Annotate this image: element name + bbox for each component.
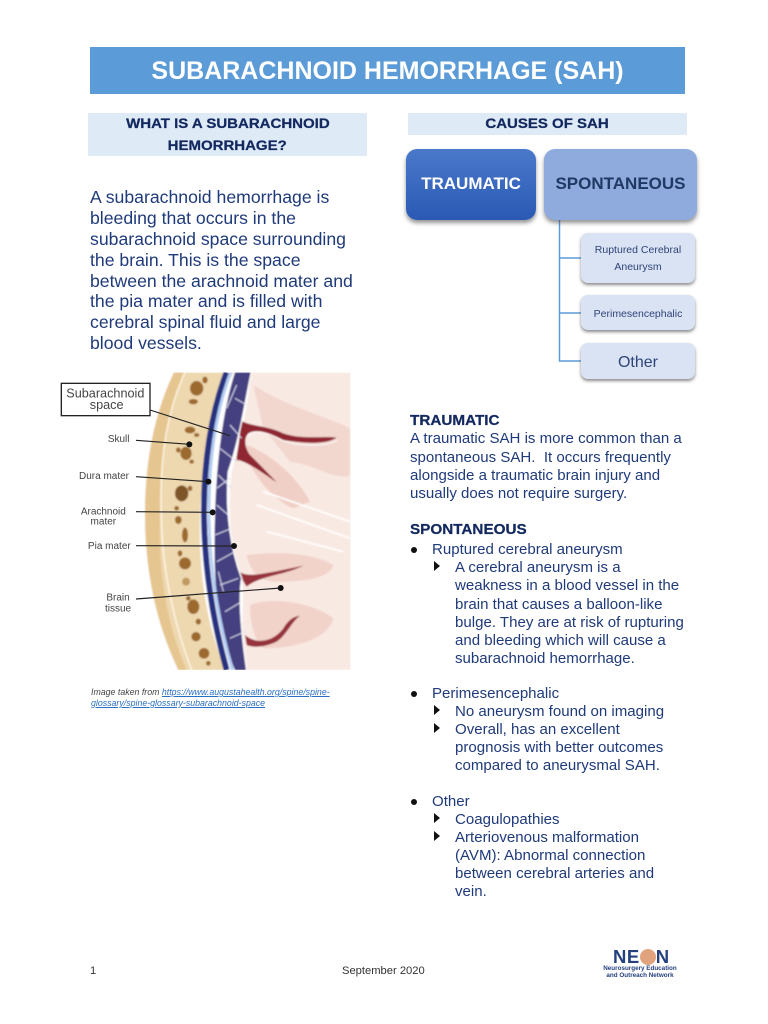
heading: causes of SAH: CAUSES OF SAH — [486, 116, 609, 131]
section: traumatic: spontaneous SAH. It occurs frequently — [410, 449, 671, 466]
section: spontaneous: brain that causes a balloon-like — [455, 596, 662, 613]
box: ruptured cerebral aneurysm: Aneurysm — [614, 261, 662, 273]
bullet: ruptured cerebral aneurysm — [411, 547, 417, 553]
box: spontaneous: SPONTANEOUS — [555, 174, 686, 193]
definition paragraph: cerebral spinal fluid and large — [90, 312, 320, 332]
bullet: other — [411, 799, 417, 805]
definition paragraph: bleeding that occurs in the — [90, 208, 296, 228]
box: traumatic — [406, 149, 536, 220]
section: spontaneous: No aneurysm found on imaging — [455, 703, 664, 720]
bullet: perimesencephalic — [411, 691, 417, 697]
heading: what is a subarachnoid hemorrhage: HEMORRHAGE? — [168, 138, 287, 152]
anatomy diagram: subarachnoid space: Brain — [106, 593, 130, 604]
image credit: glossary/spine-glossary-subarachnoid-space — [91, 698, 265, 708]
heading: what is a subarachnoid hemorrhage: WHAT IS A SUBARACHNOID — [126, 116, 329, 131]
anatomy diagram: subarachnoid space: mater — [91, 517, 117, 528]
section: traumatic: A traumatic SAH is more common than a — [410, 430, 682, 447]
definition paragraph: the brain. This is the space — [90, 250, 300, 270]
anatomy diagram: subarachnoid space: Dura mater — [79, 471, 130, 482]
section: spontaneous: prognosis with better outcomes — [455, 739, 663, 756]
footer: page number: 1 — [90, 965, 96, 977]
logo: NEON: NE N — [613, 946, 670, 967]
box: perimesencephalic — [581, 295, 695, 330]
footer: date: September 2020 — [342, 965, 425, 977]
box: other: Other — [618, 354, 658, 371]
section: spontaneous: weakness in a blood vessel in the — [455, 577, 679, 594]
section: spontaneous: Ruptured cerebral aneurysm — [432, 541, 623, 558]
section: spontaneous: Arteriovenous malformation — [455, 829, 639, 846]
section: spontaneous: compared to aneurysmal SAH. — [455, 757, 660, 774]
definition paragraph: subarachnoid space surrounding — [90, 229, 346, 249]
section: spontaneous: A cerebral aneurysm is a — [455, 559, 621, 576]
brain — [230, 372, 351, 670]
anatomy diagram: subarachnoid space: Subarachnoid — [66, 387, 144, 401]
anatomy diagram: subarachnoid space: tissue — [105, 603, 131, 614]
definition paragraph: between the arachnoid mater and — [90, 271, 353, 291]
sulci — [237, 420, 337, 482]
definition paragraph: A subarachnoid hemorrhage is — [90, 187, 329, 207]
anatomy diagram: subarachnoid space: space — [90, 398, 124, 412]
anatomy diagram: subarachnoid space: Arachnoid — [81, 507, 126, 518]
section: spontaneous: between cerebral arteries and — [455, 865, 654, 882]
logo: NEON — [603, 946, 677, 979]
section: spontaneous: bulge. They are at risk of rupturing — [455, 614, 684, 631]
title banner — [90, 47, 685, 94]
section: spontaneous: Coagulopathies — [455, 811, 560, 828]
box: ruptured cerebral aneurysm — [581, 233, 695, 283]
section: spontaneous: SPONTANEOUS — [410, 522, 527, 538]
image credit — [91, 687, 330, 708]
title banner: SUBARACHNOID HEMORRHAGE (SAH) — [151, 57, 624, 85]
image credit: Image taken from https://www.augustahealth.org/spine/spine- — [91, 687, 330, 697]
dura mater — [204, 372, 227, 670]
section: traumatic: usually does not require surgery. — [410, 485, 627, 502]
anatomy diagram: subarachnoid space: Skull — [108, 434, 130, 445]
section: spontaneous: subarachnoid hemorrhage. — [455, 650, 635, 667]
section: spontaneous: Overall, has an excellent — [455, 721, 620, 738]
section: traumatic: alongside a traumatic brain injury and — [410, 467, 660, 484]
box: other — [581, 343, 695, 379]
section: spontaneous — [410, 522, 684, 900]
definition paragraph: the pia mater and is filled with — [90, 291, 322, 311]
skull — [158, 372, 234, 670]
anatomy diagram: subarachnoid space: Pia mater — [88, 541, 131, 552]
section: spontaneous: Other — [432, 793, 470, 810]
section: traumatic — [410, 413, 682, 502]
org chart: causes of SAH — [403, 149, 700, 384]
box: perimesencephalic: Perimesencephalic — [594, 308, 682, 320]
section: spontaneous: (AVM): Abnormal connection — [455, 847, 645, 864]
heading: what is a subarachnoid hemorrhage — [88, 113, 367, 156]
section: spontaneous: and bleeding which will cause a — [455, 632, 666, 649]
section: spontaneous: vein. — [455, 883, 487, 900]
heading: causes of SAH — [408, 113, 687, 135]
box: traumatic: TRAUMATIC — [421, 174, 521, 193]
skull marrow blotches — [174, 377, 211, 666]
box: spontaneous — [544, 149, 697, 220]
label box — [61, 383, 150, 416]
logo: NEON: and Outreach Network — [606, 972, 674, 979]
arachnoid layer — [215, 372, 252, 670]
box: ruptured cerebral aneurysm: Ruptured Cerebral — [595, 244, 681, 256]
logo: NEON: Neurosurgery Education — [603, 965, 677, 972]
connector lines — [558, 220, 581, 362]
labelled pointers — [136, 410, 281, 599]
anatomy diagram: subarachnoid space — [60, 372, 350, 670]
section: traumatic: TRAUMATIC — [410, 413, 500, 429]
definition paragraph: blood vessels. — [90, 333, 202, 353]
definition paragraph — [90, 187, 353, 353]
section: spontaneous: Perimesencephalic — [432, 685, 559, 702]
